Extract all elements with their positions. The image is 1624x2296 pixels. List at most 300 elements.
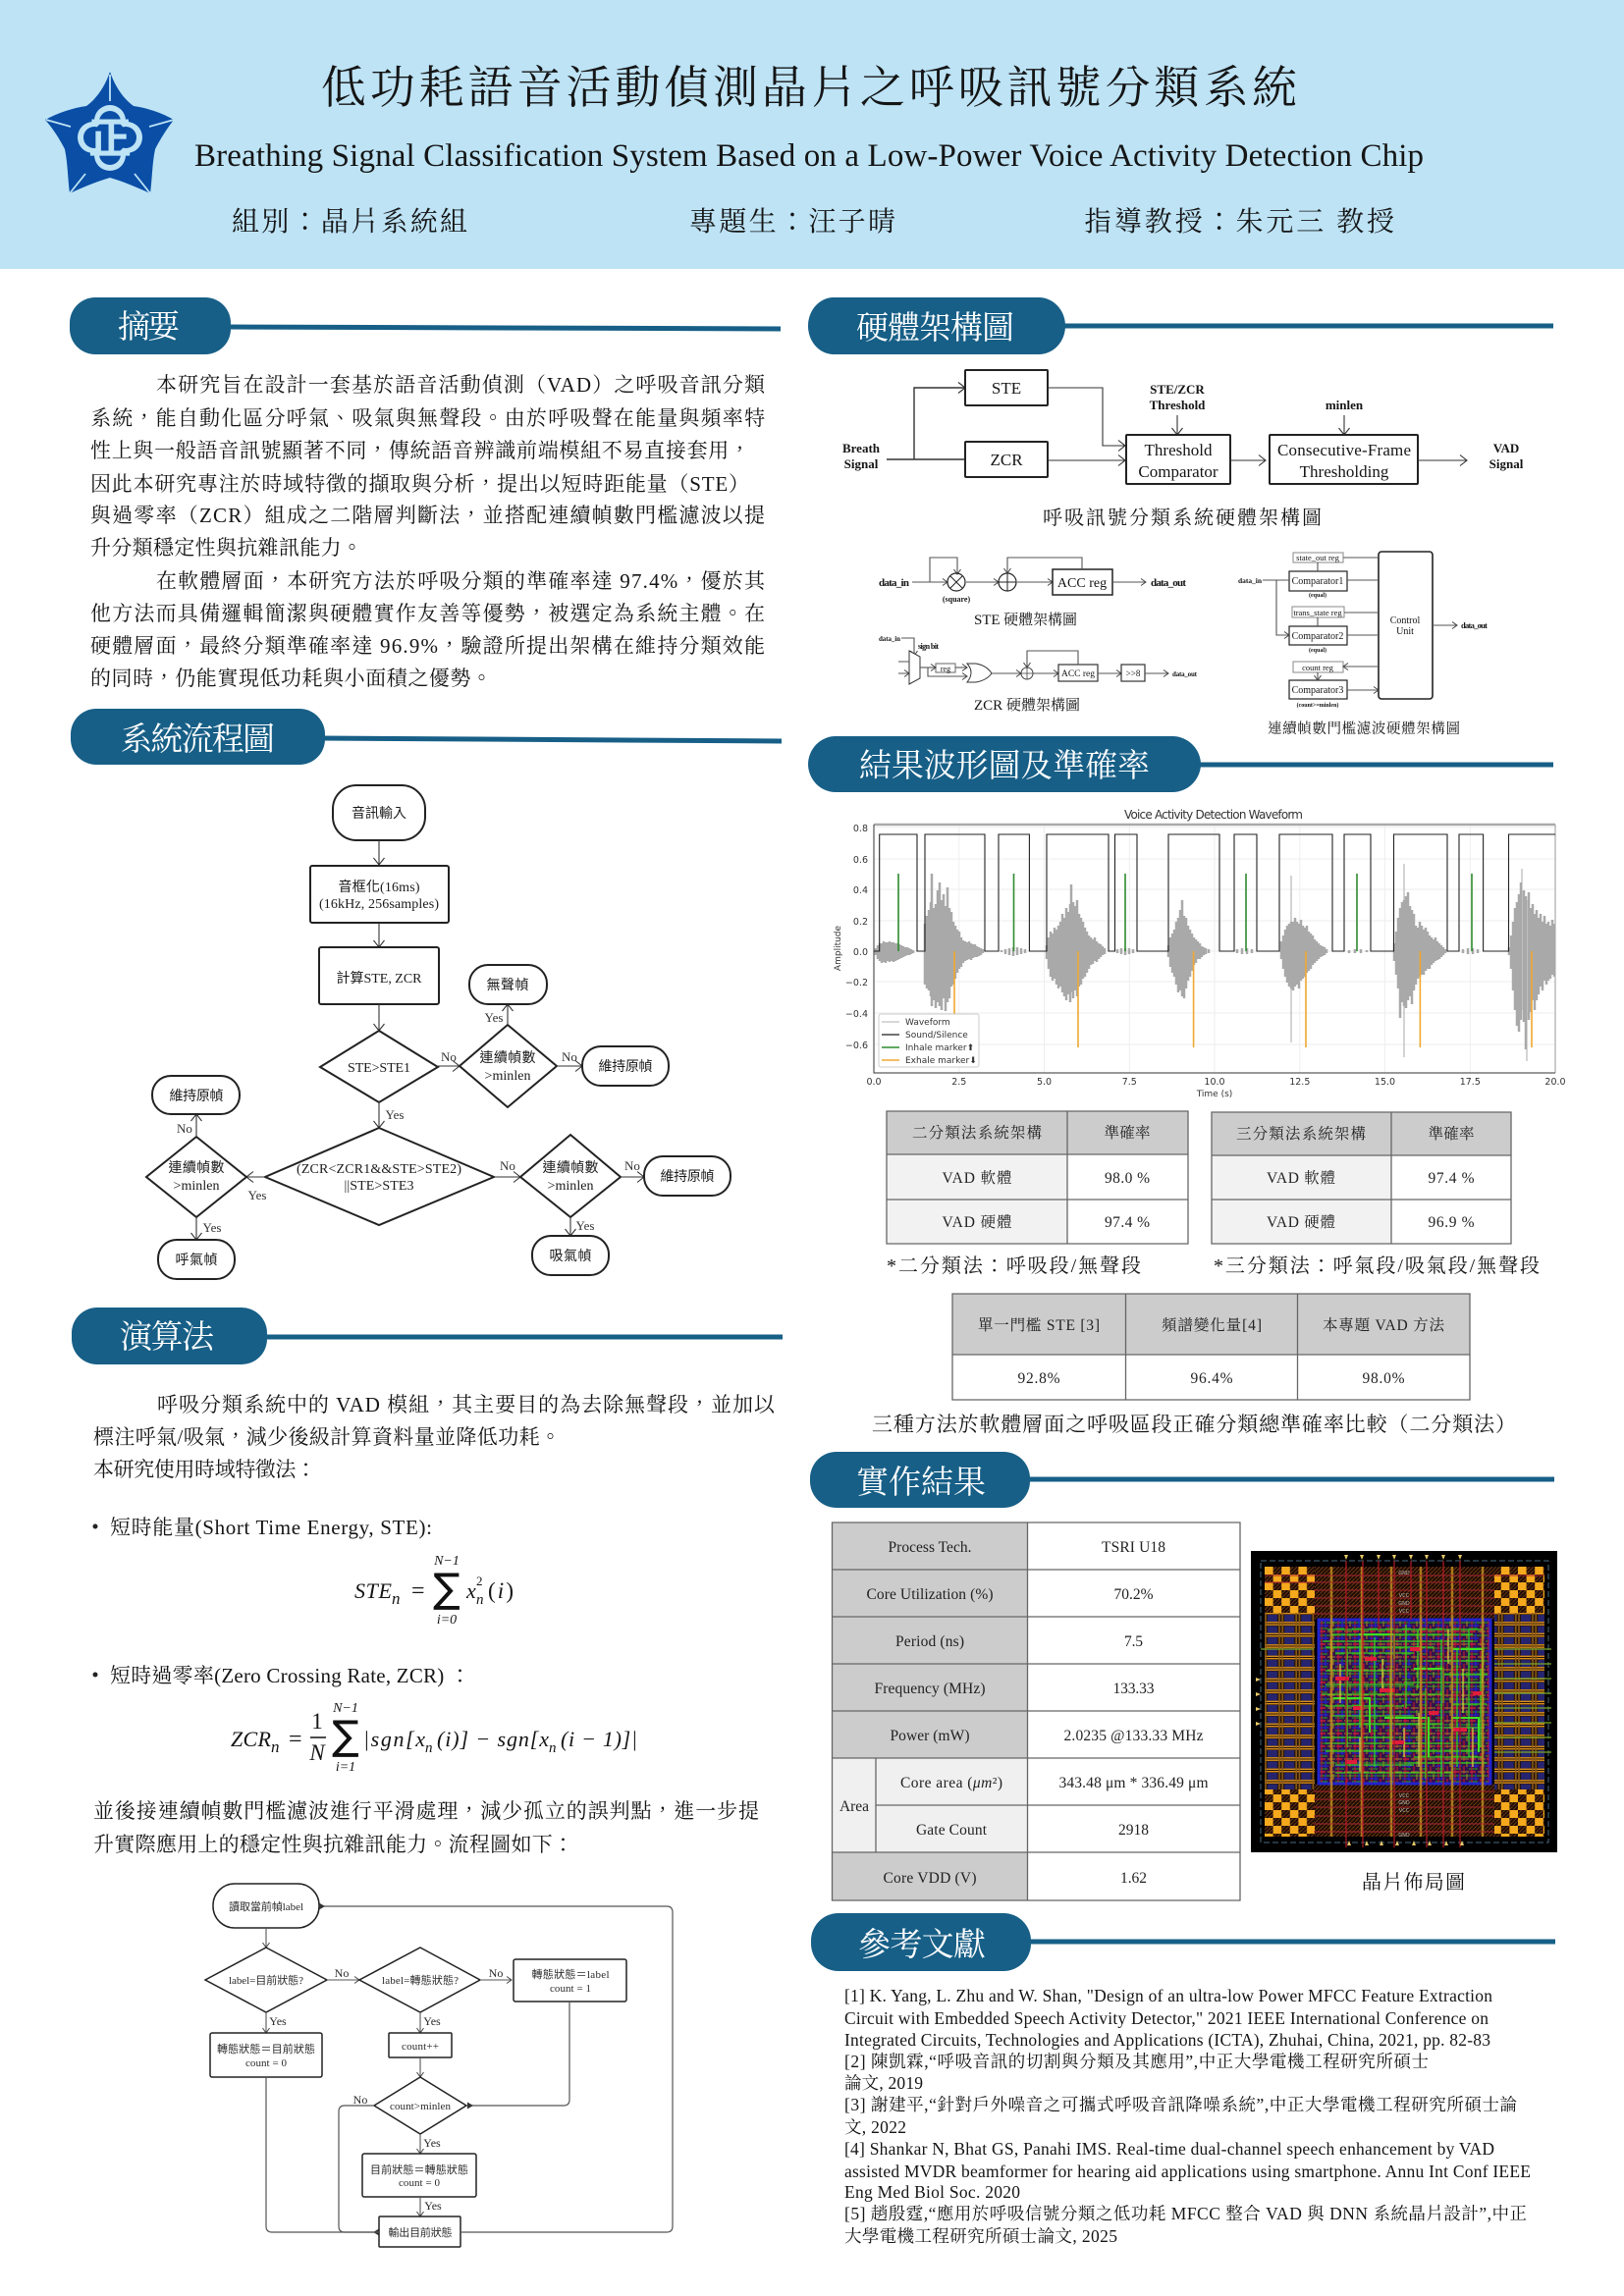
table: ternary classification: 準確率 [1428, 1125, 1475, 1143]
node: framing [310, 866, 449, 923]
heading: abstract [70, 297, 781, 354]
banner background [0, 0, 1624, 269]
decision: label current: label=目前狀態? [229, 1973, 303, 1987]
decision: STE>STE1: STE>STE1 [348, 1061, 410, 1076]
arrow: transition to decision [467, 2002, 569, 2106]
node: count plus [389, 2033, 452, 2057]
note: ternary definition: *三分類法：呼氣段/吸氣段/無聲段 [1214, 1255, 1540, 1277]
x axis labels: 2.5 [951, 1077, 966, 1088]
arrow: no to keep: No [562, 1049, 577, 1064]
note: binary definition: *二分類法：呼吸段/無聲段 [887, 1255, 1141, 1277]
diagram: consecutive frame hardware: Comparator2 [1292, 631, 1343, 642]
x axis labels [866, 1077, 1566, 1099]
x axis labels: 10.0 [1204, 1077, 1225, 1088]
node: output state [379, 2216, 460, 2247]
node: reset transition: count = 0 [245, 2057, 287, 2069]
heading: implementation results [810, 1452, 1554, 1508]
node: reset transition: 轉態狀態＝目前狀態 [217, 2042, 315, 2056]
heading: references: 參考文獻 [858, 1927, 986, 1963]
diagram: ZCR hardware: ACC reg [1061, 669, 1095, 679]
diagram: consecutive frame hardware: trans_state reg [1293, 608, 1342, 617]
node: inhale frame [532, 1236, 609, 1275]
abstract text: 性上與一般語音訊號顯著不同，傳統語音辨識前端模組不易直接套用， [90, 439, 750, 462]
formula: ZCR: |sgn[x [363, 1727, 425, 1751]
label: threshold input: STE/ZCR [1150, 382, 1205, 397]
block: STE [965, 370, 1048, 405]
legend: Inhale marker⬆ [905, 1043, 974, 1053]
node: update state: 目前狀態＝轉態狀態 [370, 2163, 468, 2176]
node: audio input [333, 785, 425, 840]
label: minlen: minlen [1326, 398, 1364, 412]
node: update state [362, 2154, 476, 2197]
bullet: STE: 短時能量(Short Time Energy, STE): [110, 1516, 432, 1539]
arrow: no: No [441, 1049, 457, 1064]
diagram: STE hardware [879, 558, 1186, 628]
label: breath signal: Breath [842, 441, 881, 455]
bullet: ZCR: 短時過零率(Zero Crossing Rate, ZCR) ： [110, 1664, 470, 1687]
table: ternary classification: 三分類法系統架構 [1236, 1125, 1366, 1143]
arrow [419, 2057, 421, 2077]
table: ternary classification: VAD 軟體 [1267, 1169, 1335, 1187]
node: compute STE ZCR: 計算STE, ZCR [336, 971, 422, 987]
chart axes and grid [874, 824, 1555, 1073]
node: set transition [514, 1959, 626, 2002]
reference list: 大學電機工程研究所碩士論文, 2025 [844, 2226, 1117, 2246]
node: keep frame far right [644, 1156, 731, 1196]
decision: minlen left: 連續幀數 [169, 1160, 224, 1176]
node: read label: 讀取當前幀label [229, 1899, 303, 1913]
decision: count minlen: count>minlen [390, 2101, 452, 2112]
arrow: yes down right: Yes [576, 1218, 594, 1233]
heading: implementation results: 實作結果 [856, 1465, 986, 1501]
x axis labels: Time (s) [1196, 1090, 1232, 1099]
table: ternary classification: 96.9 % [1428, 1214, 1475, 1231]
decision: count minlen [374, 2077, 466, 2134]
table: binary classification: 二分類法系統架構 [912, 1124, 1042, 1142]
decision: minlen right: >minlen [548, 1179, 593, 1194]
reference list: Circuit with Embedded Speech Activity Detector," 2021 IEEE International Conference on [844, 2008, 1489, 2028]
table: chip specification: Area [839, 1798, 869, 1815]
node: keep frame right: 維持原幀 [599, 1059, 652, 1075]
figure: chip layout: GND [1398, 1800, 1410, 1806]
group label: 組別：晶片系統組 [232, 206, 467, 238]
advisor label: 指導教授：朱元三 教授 [1084, 206, 1394, 238]
x axis labels: 17.5 [1460, 1077, 1481, 1088]
arrow: yes down: Yes [203, 1220, 221, 1235]
abstract text: 的同時，仍能實現低功耗與小面積之優勢。 [90, 667, 492, 690]
diagram: consecutive frame hardware: (equal) [1309, 592, 1326, 599]
table: chip specification [833, 1522, 1240, 1900]
decision: label transition: label=轉態狀態? [382, 1973, 459, 1987]
diagram: consecutive frame hardware: data_in [1238, 576, 1263, 585]
block: threshold comparator: Comparator [1138, 462, 1218, 481]
panel: results [808, 736, 1566, 1436]
table: binary classification: VAD 軟體 [943, 1169, 1011, 1187]
diagram: consecutive frame hardware: Comparator1 [1292, 576, 1343, 587]
figure: chip layout: VCC [1399, 1609, 1410, 1615]
arrow [378, 923, 380, 947]
intro text [93, 1393, 776, 1481]
abstract text: 在軟體層面，本研究方法於呼吸分類的準確率達 97.4%，優於其 [156, 569, 766, 593]
table: chip specification: Period (ns) [895, 1633, 964, 1650]
closing text: 並後接連續幀數門檻濾波進行平滑處理，減少孤立的誤判點，進一步提 [93, 1799, 759, 1823]
formula: ZCR: i=1 [336, 1760, 355, 1775]
formula: STE: = [411, 1578, 425, 1604]
node: keep frame left [152, 1076, 240, 1114]
intro text: 標注呼氣/吸氣，減少後級計算資料量並降低功耗。 [93, 1425, 561, 1449]
formula: STE: n [476, 1592, 483, 1608]
node: set transition: 轉態狀態＝label [532, 1967, 609, 1981]
x axis labels: 5.0 [1037, 1077, 1052, 1088]
heading: hardware architecture: 硬體架構圖 [856, 310, 1014, 347]
arrow [265, 1928, 267, 1948]
table: method comparison: 98.0% [1363, 1370, 1405, 1387]
x axis labels: 15.0 [1375, 1077, 1395, 1088]
formula: STE: n [392, 1589, 401, 1608]
formula: STE: ∑ [433, 1565, 460, 1612]
diagram: STE hardware: data_out [1151, 577, 1186, 589]
diagram: consecutive frame hardware: (equal) [1309, 647, 1326, 654]
closing text: 升實際應用上的穩定性與抗雜訊能力。流程圖如下： [93, 1833, 573, 1856]
y axis labels [834, 824, 868, 1051]
waveform [876, 864, 1554, 1061]
node: set transition: count = 1 [550, 1983, 591, 1995]
inhale markers [898, 874, 1472, 951]
block: ZCR [965, 442, 1048, 477]
figure: chip layout: GND [1398, 1833, 1410, 1839]
formula: STE: N−1 [433, 1554, 460, 1569]
legend [879, 1014, 979, 1067]
flowchart: consecutive frame filter [205, 1884, 673, 2247]
node: framing: (16kHz, 256samples) [319, 897, 439, 912]
reference list: [2] 陳凱霖,“呼吸音訊的切割與分類及其應用”,中正大學電機工程研究所碩士 [844, 2052, 1429, 2071]
decision: minlen upper: 連續幀數 [479, 1050, 536, 1066]
panel: hardware architecture [808, 297, 1553, 737]
block: ZCR: ZCR [990, 451, 1023, 469]
y axis labels: 0.4 [853, 885, 868, 896]
arrow: yes: Yes [386, 1107, 404, 1122]
arrow: yes [420, 2197, 442, 2216]
legend: Exhale marker⬇ [905, 1056, 977, 1066]
title: English: Breathing Signal Classification System Based on a Low-Power Voice Activity Detection Chip [194, 138, 1424, 174]
abstract text: 系統，能自動化區分呼氣、吸氣與無聲段。由於呼吸聲在能量與頻率特 [90, 406, 765, 430]
formula: STE: STE [354, 1578, 393, 1603]
abstract text: 升分類穩定性與抗雜訊能力。 [90, 536, 362, 560]
formula: STE: i=0 [437, 1613, 457, 1628]
table: method comparison: 頻譜變化量[4] [1162, 1316, 1262, 1334]
table: ternary classification [1212, 1112, 1511, 1244]
panel: system flowchart [71, 709, 782, 1279]
arrow: yes [420, 2012, 441, 2033]
arrow: yes down [196, 1217, 221, 1240]
reference list: [1] K. Yang, L. Zhu and W. Shan, "Design of an ultra-low Power MFCC Feature Extraction [844, 1986, 1492, 2005]
node: inhale frame: 吸氣幀 [550, 1249, 591, 1264]
heading: references [811, 1913, 1555, 1971]
figure: chip layout: VCC [1399, 1793, 1410, 1799]
reference list: [4] Shankar N, Bhat GS, Panahi IMS. Real-time dual-channel speech enhancement by VAD [844, 2139, 1494, 2159]
diagram: STE hardware: ACC reg [1057, 576, 1107, 591]
panel: algorithm [72, 1308, 783, 2247]
y axis labels: −0.6 [845, 1041, 868, 1051]
arrow: yes left [246, 1177, 266, 1202]
decision: ZCR [265, 1128, 494, 1225]
arrow: yes: Yes [423, 2136, 441, 2150]
arrow: reset to output [266, 2077, 379, 2232]
formula: ZCR: n [425, 1740, 432, 1756]
arrow: no to keep [557, 1049, 582, 1066]
abstract text: 本研究旨在設計一套基於語音活動偵測（VAD）之呼吸音訊分類 [156, 373, 766, 397]
diagram: consecutive frame hardware: count reg [1302, 663, 1334, 672]
heading: results: 結果波形圖及準確率 [859, 748, 1150, 784]
figure: chip layout [1251, 1551, 1557, 1852]
formula: ZCR: = [289, 1727, 302, 1752]
decision: minlen upper: >minlen [485, 1069, 530, 1084]
arrow: no [327, 1966, 359, 1980]
x axis labels: 0.0 [866, 1077, 882, 1088]
arrow [378, 1004, 380, 1031]
label: breath signal [842, 441, 881, 471]
reference list: assisted MVDR beamformer for hearing aid applications using smartphone. Annu Int Conf IEEE [844, 2162, 1531, 2181]
label: threshold input: Threshold [1150, 398, 1206, 412]
y axis labels: 0.6 [853, 855, 868, 866]
formula: ZCR: ∑ [332, 1712, 359, 1759]
arrow: yes down right [570, 1217, 594, 1236]
reference list: [3] 謝建平,“針對戶外噪音之可攜式呼吸音訊降噪系統”,中正大學電機工程研究所碩士論 [844, 2095, 1517, 2114]
diagram: STE hardware: data_in [879, 577, 909, 589]
node: exhale frame: 呼氣幀 [175, 1253, 218, 1268]
decision: label transition [359, 1948, 480, 2012]
heading: system flowchart [71, 709, 782, 765]
arrow: no [438, 1049, 460, 1066]
arrow: yes left: Yes [248, 1188, 266, 1202]
arrow: yes: Yes [423, 2014, 441, 2028]
table: method comparison: 96.4% [1190, 1370, 1233, 1387]
table: chip specification: Core Utilization (%) [866, 1586, 994, 1603]
panel: header banner [0, 0, 1624, 269]
arrow: yes [379, 1102, 404, 1128]
diagram: consecutive frame hardware: data_out [1461, 620, 1488, 630]
diagram: consecutive frame hardware: Comparator3 [1292, 685, 1343, 696]
arrow: no [480, 1966, 512, 1980]
abstract text: 與過零率（ZCR）組成之二階層判斷法，並搭配連續幀數門檻濾波以提 [90, 504, 765, 527]
node: audio input: 音訊輸入 [352, 805, 406, 822]
figure: chip layout: VCC [1399, 1593, 1410, 1599]
arrow: no up [177, 1114, 196, 1137]
label: threshold input [1150, 382, 1206, 412]
node: silent frame [469, 965, 547, 1004]
arrow [378, 840, 380, 865]
node: compute STE ZCR [319, 947, 439, 1004]
abstract text [90, 373, 766, 690]
caption: method comparison: 三種方法於軟體層面之呼吸區段正確分類總準確率比較（二分類法） [872, 1413, 1516, 1436]
table: binary classification: VAD 硬體 [943, 1213, 1011, 1231]
legend: Waveform [905, 1018, 950, 1028]
reference list: Eng Med Biol Soc. 2020 [844, 2182, 1020, 2202]
formula: STE: x [465, 1578, 476, 1603]
arrow [1418, 459, 1467, 461]
arrow: no up: No [177, 1121, 192, 1136]
arrow: yes to silence [485, 1004, 508, 1025]
figure: chip layout: VCC [1399, 1808, 1410, 1814]
diagram: ZCR hardware: data_out [1172, 670, 1198, 678]
arrow: STE to comparator [1048, 388, 1125, 446]
diagram: consecutive frame hardware: state_out reg [1296, 553, 1340, 562]
reference list: 文, 2022 [844, 2117, 906, 2137]
decision: minlen left: >minlen [173, 1179, 220, 1194]
table: method comparison: 本專題 VAD 方法 [1323, 1316, 1444, 1334]
decision: label current [205, 1948, 327, 2012]
heading: algorithm [72, 1308, 783, 1364]
x axis labels: 12.5 [1289, 1077, 1310, 1088]
abstract text: 因此本研究專注於時域特徵的擷取與分析，提出以短時距能量（STE） [90, 472, 749, 496]
chart title: Voice Activity Detection Waveform [1124, 808, 1303, 822]
arrow: yes: Yes [269, 2014, 287, 2028]
node: read label [213, 1884, 319, 1928]
y axis labels: 0.8 [853, 824, 868, 834]
y axis labels: 0.2 [853, 917, 868, 928]
node: update state: count = 0 [399, 2177, 440, 2189]
sound/silence trace [874, 834, 1555, 951]
icon: university emblem: 正 [88, 115, 132, 163]
arrow: yes: Yes [424, 2199, 442, 2213]
panel: abstract [70, 297, 781, 690]
heading: algorithm: 演算法 [120, 1319, 215, 1356]
abstract text: 硬體層面，最終分類準確率達 96.9%，驗證所提出架構在維持分類效能 [90, 634, 765, 658]
diagram: ZCR hardware: ZCR 硬體架構圖 [974, 696, 1080, 714]
y axis labels: −0.4 [845, 1009, 868, 1020]
decision: minlen upper [460, 1025, 557, 1107]
arrow: yes [420, 2134, 441, 2154]
intro text: 本研究使用時域特徵法： [93, 1458, 316, 1481]
chart: voice activity waveform [834, 808, 1566, 1099]
arrow: yes [266, 2012, 287, 2033]
diagram: STE hardware: STE 硬體架構圖 [974, 611, 1077, 628]
decision: ZCR: ||STE>STE3 [344, 1179, 414, 1194]
formula: ZCR: ZCR [231, 1727, 272, 1751]
decision: minlen right [520, 1135, 621, 1217]
table: chip specification: Core area (μm²) [900, 1775, 1002, 1791]
formula: ZCR: N−1 [332, 1701, 358, 1716]
heading: hardware architecture [808, 297, 1553, 354]
block: threshold comparator: Threshold [1145, 441, 1213, 459]
table: chip specification: Power (mW) [890, 1728, 970, 1744]
decision: minlen right: 連續幀數 [542, 1160, 599, 1176]
table: method comparison: 92.8% [1017, 1370, 1060, 1387]
icon: university emblem [45, 72, 174, 193]
student label: 專題生：汪子晴 [689, 206, 895, 238]
table: chip specification: 70.2% [1113, 1586, 1154, 1603]
node: reset transition [210, 2033, 322, 2077]
formula: STE [354, 1554, 514, 1628]
label: VAD signal: Signal [1489, 456, 1524, 471]
label: breath signal: Signal [844, 456, 879, 471]
caption: 呼吸訊號分類系統硬體架構圖 [1043, 507, 1322, 529]
node: count plus: count++ [402, 2041, 439, 2053]
arrow: loop back [319, 1906, 673, 2232]
table: ternary classification: VAD 硬體 [1267, 1213, 1335, 1231]
reference list: [5] 趙殷霆,“應用於呼吸信號分類之低功耗 MFCC 整合 VAD 與 DNN 系統晶片設計”,中正 [844, 2204, 1527, 2223]
arrow: no right [494, 1158, 520, 1177]
table: ternary classification: 97.4 % [1428, 1170, 1475, 1187]
diagram: consecutive frame hardware: Control [1390, 615, 1420, 626]
diagram: system architecture [842, 370, 1524, 529]
reference list: Integrated Circuits, Technologies and Applications (ICTA), Zhuhai, China, 2021, pp. 82-83 [844, 2030, 1490, 2050]
diagram: consecutive frame hardware: (count>=minlen) [1297, 702, 1338, 709]
table: chip specification: 343.48 μm * 336.49 μm [1058, 1775, 1208, 1791]
node: output state: 輸出目前狀態 [389, 2225, 452, 2239]
reference list: 論文, 2019 [844, 2073, 923, 2093]
label: VAD signal: VAD [1493, 441, 1519, 455]
arrow [1343, 415, 1345, 435]
formula: ZCR: (i)] − sgn[x [437, 1727, 549, 1751]
caption: chip layout: 晶片佈局圖 [1362, 1871, 1465, 1894]
formula: STE: (i) [488, 1578, 514, 1603]
table: chip specification: 2918 [1118, 1822, 1149, 1839]
arrow: no: No [489, 1966, 503, 1980]
diagram: consecutive frame hardware [1238, 552, 1488, 737]
diagram: consecutive frame hardware: Unit [1396, 626, 1414, 637]
diagram: ZCR hardware: >>8 [1126, 668, 1141, 678]
arrow [1230, 459, 1266, 461]
arrow: no: No [335, 1966, 349, 1980]
arrow: no right 2 [621, 1158, 644, 1177]
legend: Sound/Silence [905, 1031, 968, 1041]
table: chip specification: TSRI U18 [1102, 1539, 1165, 1556]
y axis labels: Amplitude [834, 925, 843, 971]
decision: minlen left [146, 1137, 246, 1217]
decision: ZCR: (ZCR<ZCR1&&STE>STE2) [297, 1162, 461, 1177]
arrow [1176, 415, 1178, 435]
figure: chip layout: GND [1398, 1601, 1410, 1607]
node: silent frame: 無聲幀 [487, 977, 528, 993]
arrow: yes to silence: Yes [485, 1010, 503, 1025]
arrow: no to output [339, 2093, 379, 2232]
flowchart: VAD decision [146, 785, 731, 1279]
formula: ZCR: (i − 1)]| [561, 1727, 637, 1751]
panel: references [811, 1913, 1555, 2246]
diagram: ZCR hardware: sign bit [918, 642, 939, 651]
table: binary classification: 98.0 % [1105, 1170, 1150, 1187]
table: binary classification [887, 1111, 1188, 1244]
node: keep frame right [582, 1046, 669, 1086]
formula: STE: 2 [476, 1574, 483, 1588]
block: consecutive frame: Thresholding [1300, 462, 1389, 481]
node: exhale frame [158, 1240, 235, 1279]
table: method comparison [952, 1294, 1470, 1400]
node: framing: 音框化(16ms) [338, 879, 420, 895]
title: Chinese: 低功耗語音活動偵測晶片之呼吸訊號分類系統 [321, 63, 1298, 113]
table: method comparison: 單一門檻 STE [3] [978, 1316, 1100, 1334]
panel: implementation results [810, 1452, 1557, 1900]
arrow: no right 2: No [624, 1158, 640, 1173]
figure: chip layout: GND [1398, 1571, 1410, 1576]
heading: abstract: 摘要 [118, 309, 180, 346]
diagram: consecutive frame hardware: 連續幀數門檻濾波硬體架構圖 [1268, 720, 1460, 737]
decision: STE>STE1 [320, 1031, 438, 1102]
table: chip specification: 133.33 [1113, 1681, 1155, 1697]
formula: ZCR: n [271, 1737, 279, 1756]
intro text: 呼吸分類系統中的 VAD 模組，其主要目的為去除無聲段，並加以 [157, 1393, 776, 1416]
table: chip specification: 7.5 [1124, 1633, 1143, 1650]
heading: results [808, 736, 1553, 792]
diagram: ZCR hardware [879, 635, 1198, 714]
heading: system flowchart: 系統流程圖 [120, 721, 275, 758]
block: STE: STE [992, 379, 1021, 398]
table: binary classification: 準確率 [1104, 1124, 1151, 1142]
table: binary classification: 97.4 % [1105, 1214, 1150, 1231]
reference list [844, 1986, 1531, 2246]
block: consecutive frame [1270, 435, 1418, 484]
